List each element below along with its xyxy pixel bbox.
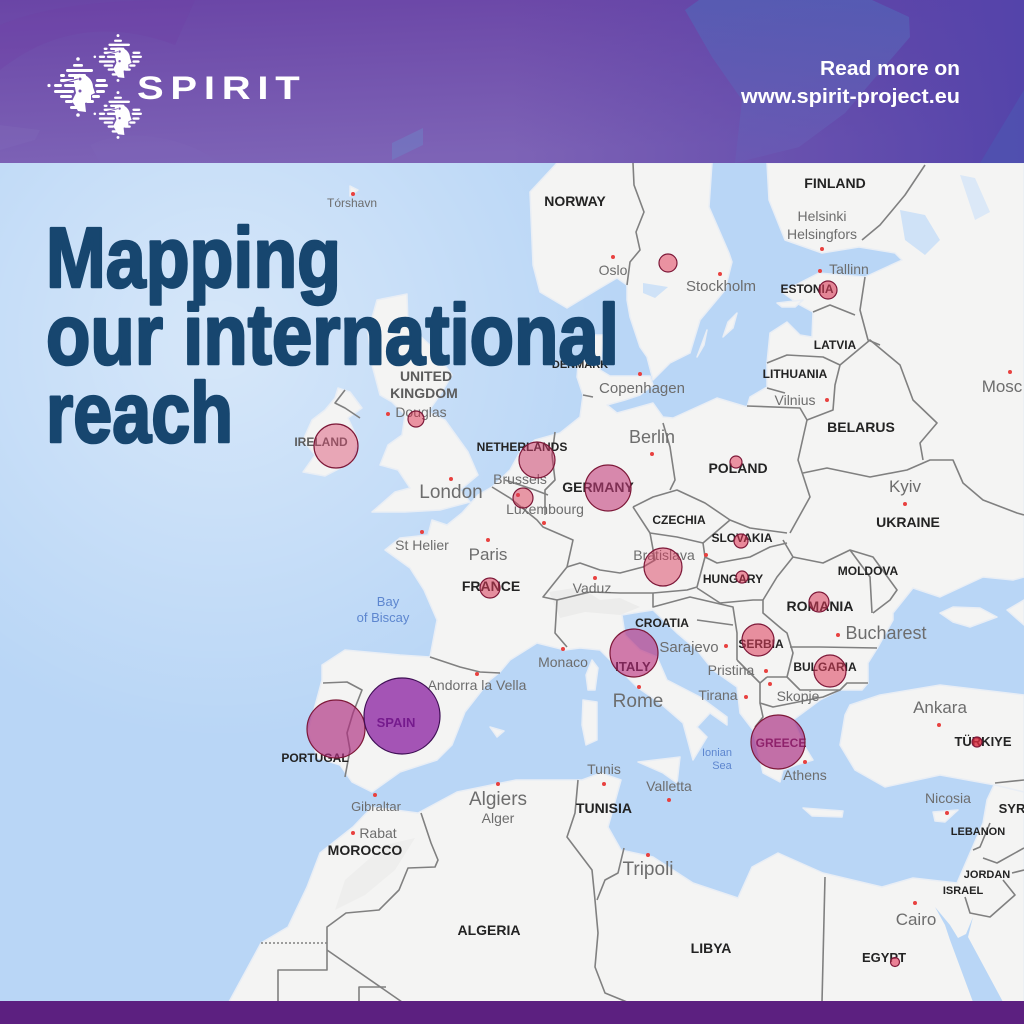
map: city labels: Andorra la Vella [428,677,527,693]
bubble: Greece [751,715,805,769]
map: country labels: FRANCE [462,578,520,594]
bubble: Netherlands [519,442,555,478]
bubble: Romania [809,592,829,612]
map: city labels: Bucharest [845,623,927,643]
map: country labels: CZECHIA [652,513,706,527]
bubble: United Kingdom [408,411,424,427]
map: city labels: Monaco [538,654,588,670]
bubble: Türkiye [972,737,982,747]
map: city labels: Pristina [708,662,755,678]
map: city labels: Ankara [913,698,967,717]
bubble: Estonia [819,281,837,299]
map: country labels: LEBANON [951,826,1005,838]
bubble: France [480,578,500,598]
map: city labels: Tórshavn [327,196,377,210]
map: country labels: UNITED [400,368,452,384]
map: country labels: GREECE [756,736,806,750]
map: city labels: Nicosia [925,790,971,806]
map: country labels: EGYPT [862,950,906,965]
map: city labels: Luxembourg [506,501,584,517]
map: country labels: PORTUGAL [281,751,349,765]
title [46,211,619,461]
map: city labels: Skopje [777,688,820,704]
map: country labels: SERBIA [738,637,784,651]
map: city labels: Tripoli [622,859,674,880]
map: country labels: BULGARIA [793,660,857,674]
map: city labels: Alger [482,810,515,826]
map: country borders [261,163,1024,1002]
map: country labels: HUNGARY [703,572,763,586]
map: city labels: Tunis [587,761,621,777]
map: capital city dots [351,192,1012,905]
map: country labels: ESTONIA [780,282,834,296]
map: country labels: UKRAINE [876,514,940,530]
map: country labels: DENMARK [552,359,608,371]
map: city labels: Cairo [896,910,936,929]
map: city labels [327,196,1023,929]
bubble: Hungary [736,571,748,583]
map: sea labels: Ionian [702,747,732,759]
map: country labels: NETHERLANDS [477,440,567,454]
map: sea labels: of Biscay [357,610,410,625]
map: city labels: Valletta [646,778,692,794]
map: country labels: FINLAND [804,175,866,191]
logo wordmark: SPIRIT [137,70,306,106]
header band [0,0,1024,163]
map: country labels: JORDAN [964,869,1010,881]
map: country labels: BELARUS [827,419,895,435]
bubble: Bulgaria [814,655,846,687]
bubble: Ireland [314,424,358,468]
map: country labels [281,175,1024,965]
map: city labels: Sarajevo [659,639,719,656]
map: country labels: SPAIN [377,715,415,730]
map: inland lakes and terrain [335,175,990,910]
map: country labels: NORWAY [544,193,606,209]
map: country labels: ITALY [615,659,651,674]
map: city labels: Gibraltar [351,799,402,814]
bubble: Italy [610,629,658,677]
map: city labels: Helsinki [797,208,847,224]
map: sea labels: Bay [377,594,400,609]
bubble: Poland [730,456,742,468]
map: sea labels: Sea [712,760,733,772]
map: city labels: Bratislava [633,547,695,563]
map: country labels: GERMANY [562,479,634,495]
map: country labels: LIBYA [691,940,731,956]
map: city labels: Copenhagen [599,380,685,397]
map: city labels: Rome [613,691,663,712]
map: city labels: Stockholm [686,278,756,295]
map: country labels: CROATIA [635,616,689,630]
map: country labels: ROMANIA [787,598,853,614]
logo: SPIRIT [47,34,306,139]
bubble: Portugal [307,700,365,758]
map: Red Sea and gulfs [935,907,1003,1002]
logo icon: left head diamond [47,57,108,117]
bubble: Sweden [659,254,677,272]
map: country labels: TUNISIA [576,800,632,816]
header link text: Read more on [820,58,960,80]
map: land masses [229,163,1024,1002]
bubble: Spain [364,678,440,754]
map: city labels: Kyiv [889,477,922,496]
map: country labels: ISRAEL [943,885,983,897]
bubble: Austria [644,548,682,586]
map: city labels: Douglas [395,404,447,420]
map: country labels: MOROCCO [328,842,402,858]
map: country labels: SLOVAKIA [711,531,773,545]
map: country labels: LATVIA [814,338,857,352]
map: country labels: KINGDOM [390,385,458,401]
header link text: www.spirit-project.eu [740,86,960,108]
logo icon: lower head diamond [94,91,142,139]
footer bar [0,1001,1024,1024]
map: city labels: Oslo [599,262,628,278]
map: city labels: Rabat [359,825,397,841]
map: country labels: IRELAND [294,435,348,449]
map: city labels: Algiers [469,789,527,810]
map: city labels: London [419,482,483,503]
map: project reach bubbles [307,254,982,966]
bubble: Serbia [742,624,774,656]
title: Mapping [46,211,341,306]
map: sea labels [357,594,733,772]
map: country labels: ALGERIA [458,922,520,938]
logo icon: upper head diamond [94,34,142,82]
map: city labels: Tirana [698,687,738,703]
map: city labels: Brussels [493,471,547,487]
map: city labels: Mosc [982,377,1023,396]
map: city labels: Vaduz [573,580,611,596]
map: city labels: Paris [469,545,507,564]
bubble: Slovakia [734,534,748,548]
bubble: Germany [585,465,631,511]
map: water glow behind title [0,163,720,803]
bubble: Belgium [513,488,533,508]
map: city labels: Vilnius [774,392,816,408]
title: our international [46,288,619,383]
map: country labels: TÜRKIYE [954,734,1012,749]
map: country labels: POLAND [708,460,768,476]
map: city labels: St Helier [395,537,449,553]
map: country labels: MOLDOVA [838,564,899,578]
map: country labels: LITHUANIA [763,367,828,381]
map: city labels: Helsingfors [787,226,857,242]
map: city labels: Tallinn [829,261,869,277]
bubble: Egypt [890,958,900,966]
header link text [740,58,960,108]
title: reach [46,366,233,461]
map: city labels: Berlin [629,427,675,447]
map: city labels: Athens [783,767,827,783]
